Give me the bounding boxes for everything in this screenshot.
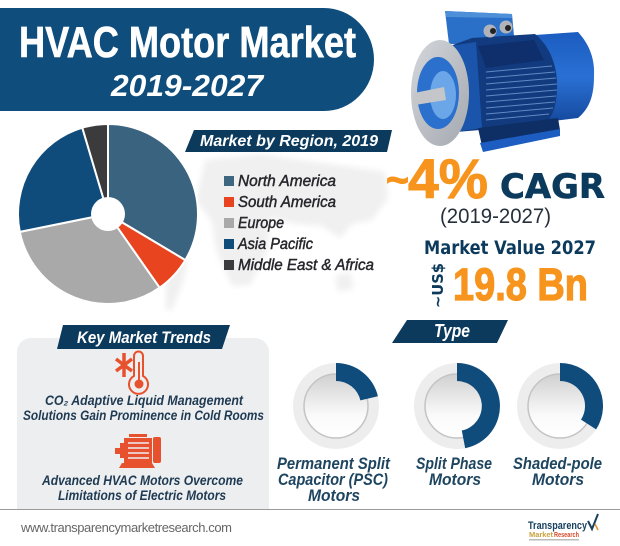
label: split phase motors: Split Phase bbox=[416, 455, 492, 473]
terminal box bbox=[445, 11, 514, 44]
Europe slice bbox=[20, 214, 160, 304]
logo: transparency market research: Market bbox=[529, 530, 553, 539]
South America slice bbox=[108, 214, 185, 288]
label: shaded-pole motors: Motors bbox=[532, 471, 584, 489]
market value stat bbox=[424, 237, 596, 310]
donut: split phase motors bbox=[414, 363, 500, 449]
donut: shaded-pole motors bbox=[517, 363, 603, 449]
title: HVAC Motor Market bbox=[19, 18, 356, 67]
legend: Asia Pacific: Asia Pacific bbox=[237, 236, 313, 253]
label: permanent split capacitor motors bbox=[277, 455, 391, 505]
market value stat: 19.8 Bn bbox=[453, 259, 588, 310]
heading: type: Type bbox=[434, 321, 470, 341]
cooling fins bbox=[486, 66, 557, 120]
label: split phase motors bbox=[416, 455, 492, 489]
CAGR stat: ~ bbox=[386, 156, 409, 203]
trend text 2: Limitations of Electric Motors bbox=[58, 488, 226, 503]
label: permanent split capacitor motors: Capacitor (PSC) bbox=[278, 471, 388, 489]
panel: key market trends bbox=[17, 325, 269, 509]
trend text 2 bbox=[41, 473, 243, 503]
donut value arc bbox=[560, 363, 603, 429]
trend text 1: Solutions Gain Prominence in Cold Rooms bbox=[23, 408, 264, 423]
CAGR stat: 4% bbox=[408, 147, 488, 210]
pie centre hole bbox=[91, 197, 125, 231]
website url: www.transparencymarketresearch.com bbox=[20, 520, 232, 535]
icon: snowflake and thermometer bbox=[116, 352, 148, 394]
logo: transparency market research bbox=[528, 514, 598, 540]
Asia Pacific slice bbox=[18, 128, 108, 232]
legend: Middle East and Africa: Middle East & Africa bbox=[238, 257, 374, 274]
logo: transparency market research: Research bbox=[554, 530, 579, 539]
label: split phase motors: Motors bbox=[429, 471, 481, 489]
donut: permanent split capacitor motors bbox=[293, 363, 379, 449]
donut value arc bbox=[336, 363, 378, 400]
legend: North America: North America bbox=[238, 173, 336, 190]
market value stat: ~US$ bbox=[429, 263, 447, 308]
motor body bbox=[450, 34, 557, 132]
label: permanent split capacitor motors: Permanent Split bbox=[277, 455, 391, 473]
icon: electric motor bbox=[115, 434, 161, 468]
CAGR stat: (2019-2027) bbox=[440, 205, 551, 228]
front flange bbox=[411, 40, 469, 146]
logo: transparency market research: Transparency bbox=[528, 520, 588, 532]
heading: market by region: Market by Region, 2019 bbox=[200, 133, 378, 150]
label: shaded-pole motors bbox=[513, 455, 602, 489]
trend text 1: CO₂ Adaptive Liquid Management bbox=[45, 393, 243, 408]
motor feet bbox=[478, 118, 560, 146]
motor illustration bbox=[411, 11, 594, 152]
heading: type bbox=[392, 320, 508, 343]
background world map bbox=[165, 154, 388, 310]
legend: South America: South America bbox=[238, 194, 336, 211]
donut value arc bbox=[457, 363, 500, 448]
label: permanent split capacitor motors: Motors bbox=[308, 487, 360, 505]
legend: Europe: Europe bbox=[238, 215, 284, 232]
CAGR stat bbox=[386, 147, 605, 228]
legend bbox=[224, 173, 374, 274]
CAGR stat: CAGR bbox=[500, 167, 605, 207]
pie chart: market by region bbox=[18, 124, 198, 304]
rear fan cover bbox=[535, 32, 594, 122]
heading: market by region bbox=[185, 130, 392, 152]
shaft bbox=[413, 87, 446, 105]
North America slice bbox=[108, 124, 198, 260]
trend text 1 bbox=[23, 393, 264, 423]
cable glands bbox=[484, 24, 496, 38]
label: shaded-pole motors: Shaded-pole bbox=[513, 455, 602, 473]
title banner bbox=[0, 8, 374, 111]
market value stat: Market Value 2027 bbox=[424, 237, 596, 259]
title years: 2019-2027 bbox=[110, 68, 265, 103]
Middle East and Africa slice bbox=[82, 124, 108, 214]
trend text 2: Advanced HVAC Motors Overcome bbox=[41, 473, 243, 488]
heading: key market trends bbox=[57, 325, 230, 349]
heading: key market trends: Key Market Trends bbox=[77, 329, 211, 347]
